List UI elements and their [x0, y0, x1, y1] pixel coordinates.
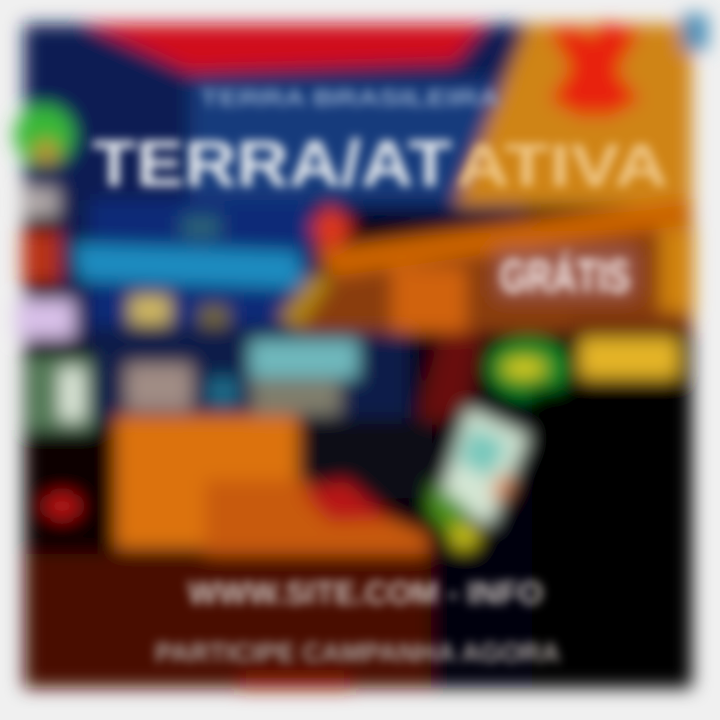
- icon: small amber badge: [200, 306, 228, 326]
- cross stroke one: [548, 28, 640, 120]
- panel: white pill button: [496, 248, 636, 298]
- panel: red top band: [85, 24, 485, 72]
- card yellow tip: [452, 522, 482, 550]
- panel: brown right section: [300, 224, 692, 332]
- panel: orange main block: [116, 416, 298, 548]
- icon: red dot: [44, 493, 80, 519]
- panel: cyan banner: [74, 244, 302, 288]
- icon: flag diamond: [502, 358, 546, 378]
- panel: orange pillars: [392, 268, 466, 332]
- icon: small teal square: [208, 378, 238, 406]
- panel: right amber strip: [660, 228, 694, 312]
- panel: dark red footer: [26, 554, 431, 688]
- icon: left green card highlight: [60, 368, 84, 420]
- card green base: [428, 482, 468, 548]
- panel: right brown strip: [570, 316, 692, 332]
- panel: red footer edge: [240, 676, 350, 690]
- panel: left column pale strip: [22, 188, 58, 216]
- icon: orange dot in green circle: [34, 140, 58, 164]
- heading: orange: ATIVA: [456, 132, 668, 199]
- footer line one: WWW.SITE.COM - INFO: [188, 575, 543, 611]
- panel: yellow badge: [580, 338, 678, 378]
- panel: cyan photo: [250, 340, 358, 378]
- panel: header mid blue: [190, 80, 510, 200]
- icon: red diamond: [310, 205, 354, 254]
- panel: left navy column: [60, 190, 90, 340]
- card orange accent: [490, 472, 514, 502]
- panel: charcoal block: [262, 418, 432, 498]
- panel: orange corner: [455, 24, 692, 205]
- panel: red stripe: [300, 480, 392, 522]
- icon: tilted card: [428, 408, 528, 550]
- panel: navy header: [24, 24, 524, 214]
- subtitle: TERRA BRASILEIRA: [200, 85, 500, 112]
- footer line two: PARTICIPE CAMPANHA AGORA: [155, 637, 560, 668]
- panel: navy centre: [92, 325, 410, 420]
- icon: brazil flag: [488, 338, 568, 398]
- icon: green circle: [14, 105, 74, 165]
- title text: [92, 85, 668, 668]
- icon: blue corner mark: [682, 14, 708, 50]
- card body: [440, 408, 528, 525]
- card teal panel: [458, 426, 508, 478]
- icon: left violet block: [16, 300, 74, 338]
- panel: blue mid section: [90, 200, 312, 340]
- icon: left red block: [22, 232, 62, 282]
- panel: small teal tag: [182, 216, 220, 238]
- panel: orange extension: [205, 480, 428, 556]
- icon: yellow badge: [130, 296, 170, 324]
- icon: amber arrow: [278, 272, 332, 330]
- cross stroke two: [550, 22, 640, 120]
- panel: grey card: [126, 364, 192, 410]
- panel: black lower right: [532, 388, 692, 688]
- heading: white: TERRA/AT: [92, 126, 452, 200]
- icon: left green card: [28, 358, 94, 430]
- panel: orange diagonal band: [315, 198, 692, 280]
- panel: grey photo: [252, 380, 340, 414]
- icon: red cross: [548, 22, 640, 120]
- panel: dark red column: [415, 332, 482, 432]
- panel: left dark column: [24, 435, 114, 560]
- pill label: GRÁTIS: [500, 250, 630, 302]
